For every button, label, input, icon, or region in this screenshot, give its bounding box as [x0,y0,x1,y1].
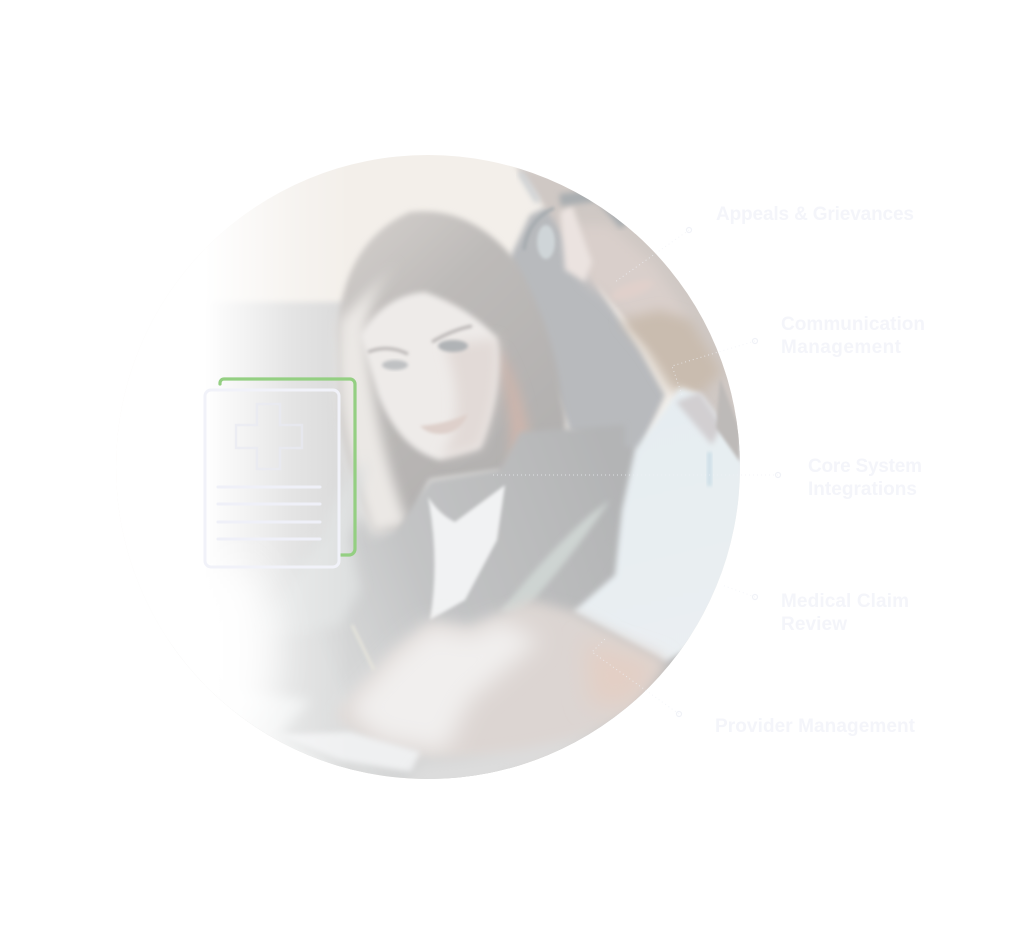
blue shirt stripe [707,452,712,486]
man's shirt collar [676,394,719,444]
label: Medical Claim Review: Medical Claim [781,591,909,612]
hands foreground [422,599,668,757]
man's glasses frame [524,208,554,250]
woman's jacket [413,428,620,510]
paper on desk [275,732,420,772]
pen [352,626,372,666]
medical cross [236,404,302,469]
man's shirt [573,388,745,662]
label: Appeals & Grievances: Appeals & Grievances [716,204,914,225]
infographic canvas [171,155,924,779]
photo background wall [248,155,676,424]
fingers highlight [345,620,540,752]
man's dark hair and jacket [508,195,665,450]
label: Communication Management [781,314,925,358]
woman's mouth [421,416,465,435]
woman's brows [368,326,472,354]
woman's face [360,292,498,460]
desk bottom [414,746,566,779]
woman's hair [337,211,566,530]
man's dark glasses band [560,195,625,225]
lower body base [356,444,686,779]
green jacket lapel highlight [504,504,606,610]
label: Provider Management: Provider Management [715,716,916,737]
right hand warm shade [591,652,655,700]
woman's arm sleeve [313,521,358,620]
face shadow [440,338,498,458]
connector dots and dotted leader lines [492,228,780,716]
icon: medical document [205,379,355,567]
left white fade [206,194,308,734]
dark monitor behind [246,300,365,566]
label: Core System Integrations: Core System [808,456,922,477]
man's nose [560,205,592,282]
man's mouth [609,276,655,304]
woman's hair light strands [338,260,408,535]
man's face [585,230,674,311]
label: Medical Claim Review [781,591,909,635]
glasses arm [520,172,538,202]
man's dark neck shadow [716,378,740,462]
green back sheet [220,379,355,555]
man's head [516,168,740,447]
lower-left extra fade [237,596,276,689]
woman's eyes [382,360,408,370]
front sheet [205,390,339,567]
label: Communication Management: Communication [781,314,925,335]
label: Medical Claim Review: Review [781,614,847,635]
document text lines [218,487,320,539]
label: Core System Integrations [808,456,922,500]
label: Core System Integrations: Integrations [808,479,917,500]
photo circle: two colleagues at a desk [171,155,740,779]
man's beard [620,310,722,395]
woman's red hair tint [502,360,530,448]
label: Communication Management: Management [781,337,902,358]
woman's white shirt [428,485,505,620]
desk lower left [264,699,323,760]
